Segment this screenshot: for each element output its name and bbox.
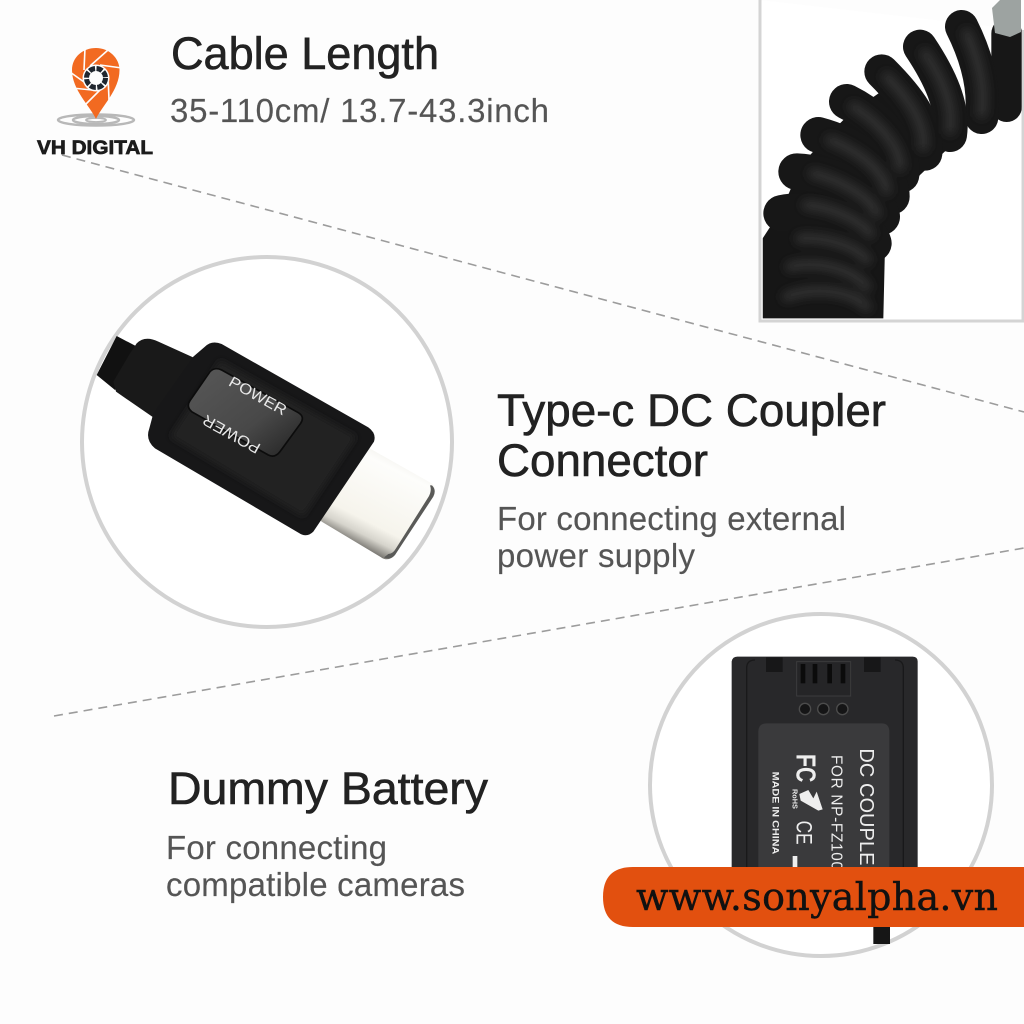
label text: DC COUPLER bbox=[855, 748, 877, 880]
text: Type-C description: power supply bbox=[497, 537, 696, 574]
label text: CE bbox=[792, 821, 817, 845]
plug metal bbox=[318, 447, 435, 559]
text: cable length values: 35-110cm/ 13.7-43.3inch bbox=[170, 92, 549, 129]
text: Type-C description: For connecting external bbox=[497, 500, 846, 537]
coil body bbox=[763, 90, 950, 318]
cable and strain relief bbox=[96, 336, 193, 417]
text: Dummy Battery description: compatible cameras bbox=[166, 866, 465, 903]
three screws bbox=[799, 703, 848, 715]
circle outline bbox=[650, 614, 992, 956]
coiled cable bbox=[763, 27, 1007, 318]
cable below banner bbox=[873, 923, 890, 944]
label text: MADE IN CHINA bbox=[770, 772, 780, 855]
label text: RoHS bbox=[790, 789, 799, 809]
text: Type-C description bbox=[497, 500, 846, 574]
heading: Cable Length: Cable Length bbox=[171, 28, 439, 79]
heading: Type-c DC Coupler Connector bbox=[497, 385, 886, 486]
terminal notches bbox=[766, 657, 881, 672]
label text: FOR NP-FZ100 bbox=[828, 755, 845, 870]
dashed divider: lower bbox=[54, 548, 1024, 716]
circle outline bbox=[82, 257, 452, 627]
label text: FC bbox=[791, 754, 822, 782]
coil highlights bbox=[787, 33, 983, 307]
banner text: www.sonyalpha.vn bbox=[636, 875, 998, 919]
panel: coiled cable photo bbox=[760, 0, 1023, 321]
POWER label bbox=[188, 369, 302, 456]
plug housing bbox=[148, 342, 375, 535]
panel: Type-C connector circle bbox=[82, 257, 452, 627]
label text bbox=[770, 748, 877, 880]
terminal block bbox=[797, 662, 851, 696]
coil loops bbox=[782, 27, 1007, 243]
POWER text inverted: POWER bbox=[200, 411, 264, 456]
heading: Type-c DC Coupler Connector: Type-c DC Coupler bbox=[497, 385, 886, 436]
dashed divider: upper bbox=[62, 155, 1024, 412]
photo: dummy battery bbox=[732, 657, 918, 944]
photo frame bbox=[760, 0, 1023, 321]
heading: Dummy Battery: Dummy Battery bbox=[168, 763, 489, 814]
icon: rings under pin bbox=[58, 114, 134, 126]
text: Dummy Battery description: For connecting bbox=[166, 829, 387, 866]
photo: Type-C plug bbox=[97, 336, 435, 559]
text: Dummy Battery description bbox=[166, 829, 465, 903]
logo wordmark: VH DIGITAL bbox=[37, 138, 153, 159]
banner: website URL bbox=[603, 867, 1024, 927]
battery body bbox=[732, 657, 918, 910]
heading: Type-c DC Coupler Connector: Connector bbox=[497, 435, 708, 486]
connector tip at top right bbox=[992, 0, 1021, 37]
POWER text: POWER bbox=[226, 374, 289, 419]
battery inner edges bbox=[747, 660, 903, 910]
icon: orange aperture pin bbox=[70, 48, 122, 119]
logo: VH Digital bbox=[37, 48, 153, 159]
panel: dummy battery circle bbox=[650, 614, 992, 956]
label plate bbox=[758, 723, 889, 877]
